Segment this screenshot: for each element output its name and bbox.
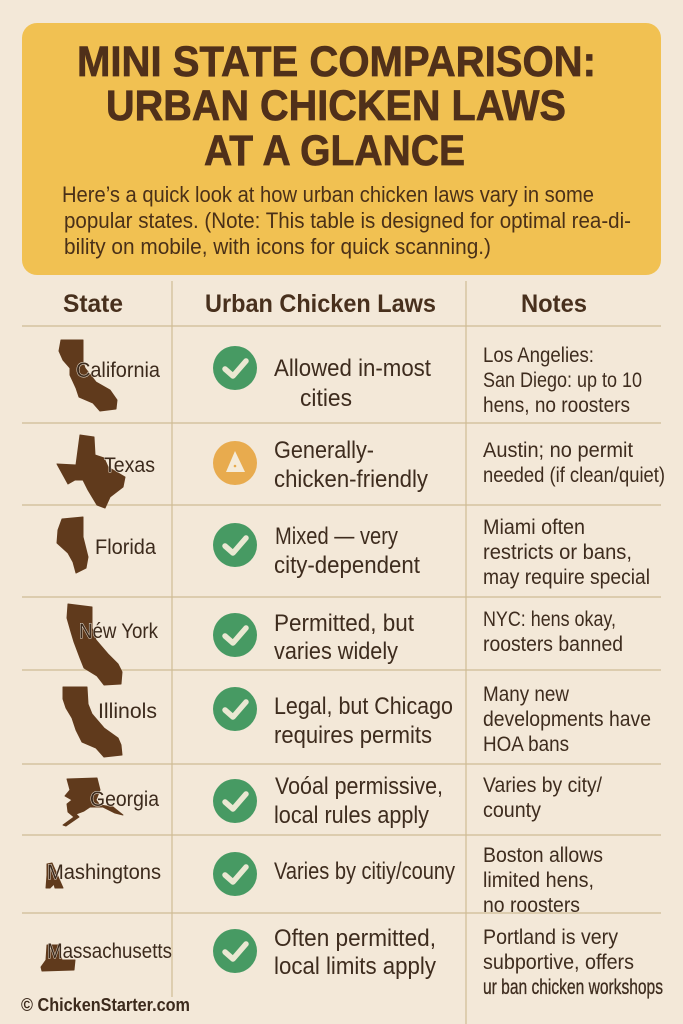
state name Massachusetts: Massachusetts xyxy=(47,939,172,963)
icon: allowed check xyxy=(213,779,257,823)
notes Texas: Austin; no permit xyxy=(483,438,633,462)
notes Georgia xyxy=(483,773,602,822)
law text Texas xyxy=(274,437,429,493)
state name Texas: Texas xyxy=(104,453,155,477)
law text Massachusetts: local limits apply xyxy=(274,953,437,980)
state name California: California xyxy=(76,358,160,382)
state name New York: Néw York xyxy=(79,619,158,643)
law text Texas: chicken-friendly xyxy=(274,466,429,493)
title: AT A GLANCE xyxy=(204,127,465,175)
notes Texas xyxy=(483,438,665,487)
intro text block xyxy=(62,182,631,259)
notes Washington: Boston allows xyxy=(483,843,603,867)
icon: caution triangle xyxy=(213,441,257,485)
state name Washington: Mashingtons xyxy=(47,860,161,884)
icon: state silhouette Illinois xyxy=(63,687,122,757)
notes California xyxy=(483,343,642,417)
row: Georgia xyxy=(63,773,602,829)
law text Florida: city-dependent xyxy=(274,552,420,579)
notes Massachusetts: Portland is very xyxy=(483,925,618,949)
table header: Urban Chicken Laws xyxy=(205,290,436,318)
law text Illinois xyxy=(274,693,453,749)
icon: allowed check xyxy=(213,346,257,390)
law text Illinois: requires permits xyxy=(274,722,432,749)
law text California: Allowed in-most xyxy=(274,355,431,382)
notes Massachusetts: subportive, offers xyxy=(483,950,634,974)
law text Georgia xyxy=(274,773,443,829)
notes Florida: restricts or bans, xyxy=(483,540,632,564)
state name Illinois: Illinols xyxy=(98,699,157,723)
notes Florida: may require special xyxy=(483,565,650,589)
table header: State xyxy=(63,290,123,318)
icon: allowed check xyxy=(213,523,257,567)
row: New York xyxy=(67,604,623,685)
icon: state silhouette Massachusetts xyxy=(41,945,75,971)
law text Florida: Mixed — very xyxy=(275,523,399,550)
intro text block: popular states. (Note: This table is designed for optimal rea-di- xyxy=(64,208,631,233)
icon: state silhouette Texas xyxy=(57,435,125,508)
law text Florida xyxy=(274,523,420,579)
state name Florida: Florida xyxy=(95,535,156,559)
title xyxy=(77,38,596,175)
law text New York: varies widely xyxy=(274,638,399,665)
notes California: San Diego: up to 10 xyxy=(483,368,642,392)
row: Florida xyxy=(57,515,650,589)
law text New York: Permitted, but xyxy=(274,610,414,637)
row: Washington xyxy=(46,843,603,917)
intro text block: bility on mobile, with icons for quick scanning.) xyxy=(64,234,491,259)
law text California: cities xyxy=(300,385,352,412)
title: MINI STATE COMPARISON: xyxy=(77,38,596,86)
row: Massachusetts xyxy=(41,925,663,999)
notes Florida: Miami often xyxy=(483,515,585,539)
notes New York: roosters banned xyxy=(483,632,623,656)
notes Georgia: Varies by city/ xyxy=(483,773,602,797)
icon: allowed check xyxy=(213,613,257,657)
law text Georgia: Voóal permissive, xyxy=(275,773,443,800)
notes Illinois: developments have xyxy=(483,707,651,731)
title: URBAN CHICKEN LAWS xyxy=(106,82,566,130)
law text New York xyxy=(274,610,414,665)
notes Washington xyxy=(483,843,603,917)
icon: state silhouette Florida xyxy=(57,517,88,573)
panel: header banner xyxy=(22,23,661,275)
icon: state silhouette Washington xyxy=(46,863,63,888)
icon: state silhouette New York xyxy=(67,604,122,685)
law text Washington: Varies by citiy/couny xyxy=(274,858,456,885)
icon: allowed check xyxy=(213,929,257,973)
notes Washington: limited hens, xyxy=(483,868,594,892)
notes Washington: no roosters xyxy=(483,893,580,917)
row: California xyxy=(59,340,642,417)
law text Texas: Generally- xyxy=(274,437,374,464)
icon: state silhouette Georgia xyxy=(63,778,123,826)
intro text block: Here’s a quick look at how urban chicken laws vary in some xyxy=(62,182,594,207)
notes Florida xyxy=(483,515,650,589)
icon: allowed check xyxy=(213,687,257,731)
law text Massachusetts: Often permitted, xyxy=(274,925,436,952)
notes Illinois xyxy=(483,682,651,756)
notes Georgia: county xyxy=(483,798,541,822)
footer credit: © ChickenStarter.com xyxy=(21,995,190,1015)
law text California xyxy=(274,355,431,412)
law text Illinois: Legal, but Chicago xyxy=(274,693,453,720)
row: Texas xyxy=(57,435,665,508)
law text Georgia: local rules apply xyxy=(274,802,430,829)
table header: Notes xyxy=(521,290,587,318)
notes New York xyxy=(483,607,623,656)
state name Georgia: Georgia xyxy=(90,787,159,811)
table header xyxy=(63,290,587,318)
notes California: Los Angelies: xyxy=(483,343,594,367)
notes Illinois: Many new xyxy=(483,682,569,706)
row: Illinois xyxy=(63,682,651,757)
notes Massachusetts xyxy=(483,925,663,999)
notes California: hens, no roosters xyxy=(483,393,630,417)
law text Massachusetts xyxy=(274,925,437,980)
icon: allowed check xyxy=(213,852,257,896)
icon: state silhouette California xyxy=(59,340,117,411)
notes Illinois: HOA bans xyxy=(483,732,569,756)
notes New York: NYC: hens okay, xyxy=(483,607,616,631)
